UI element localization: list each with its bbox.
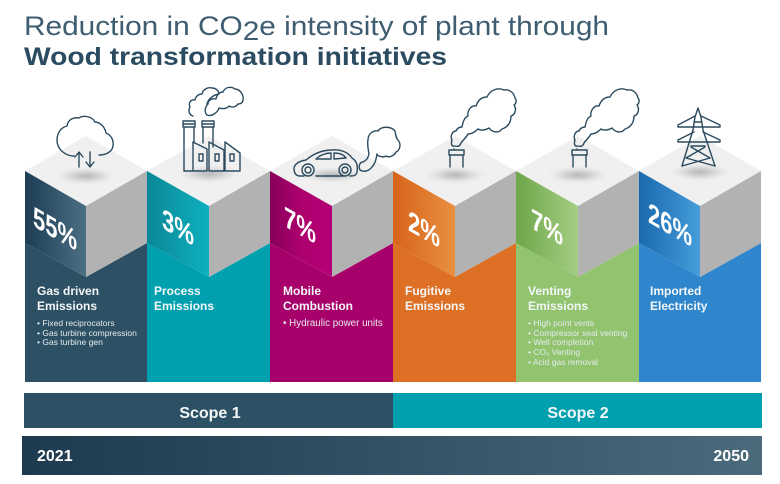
panel: venting emissions: • CO₂ Venting — [528, 347, 580, 357]
panel: gas driven emissions: Gas driven — [37, 284, 99, 298]
panel: gas driven emissions: • Gas turbine compression — [37, 328, 137, 338]
panel: gas driven emissions: 55% — [33, 200, 77, 258]
scope 2 bar: Scope 2 — [547, 405, 609, 422]
panel: gas driven emissions: • Gas turbine gen — [37, 337, 103, 347]
title — [24, 11, 609, 71]
scope 2 bar — [393, 393, 762, 428]
title: Reduction in CO — [24, 11, 222, 41]
title: Wood transformation initiatives — [24, 43, 447, 71]
panel: venting emissions: 7% — [531, 202, 563, 253]
panel: gas driven emissions: Emissions — [37, 299, 97, 313]
panel: venting emissions: Emissions — [528, 299, 588, 313]
panel: mobile combustion: 7% — [284, 200, 316, 251]
panel: gas driven emissions — [25, 136, 147, 382]
panel: venting emissions — [516, 136, 639, 382]
icon: cloud with arrows — [57, 116, 113, 167]
panel: gas driven emissions: • Fixed reciprocators — [37, 318, 115, 328]
panel: imported electricity: Imported — [650, 284, 701, 298]
icon: factory — [183, 87, 243, 171]
timeline bar: 2021 — [37, 448, 73, 465]
scope 1 bar: Scope 1 — [179, 405, 241, 422]
title: 2 — [243, 16, 259, 46]
scope 1 bar — [24, 393, 393, 428]
panel: imported electricity: Electricity — [650, 299, 708, 313]
panel: venting emissions: • Well completion — [528, 337, 593, 347]
panel: fugitive emissions: Fugitive — [405, 284, 451, 298]
icon: fugitive stack and smoke — [449, 89, 516, 167]
timeline bar: 2050 — [713, 448, 749, 465]
title: e intensity of plant through — [259, 11, 609, 41]
panel: venting emissions: • Compressor seal venting — [528, 328, 628, 338]
panel: imported electricity: 26% — [648, 196, 692, 254]
icon: venting stack and smoke — [572, 89, 639, 167]
panel: venting emissions: • Acid gas removal — [528, 357, 598, 367]
panel: process emissions: Process — [154, 284, 201, 298]
icon: power pylon — [678, 108, 720, 166]
panel: mobile combustion — [270, 136, 393, 382]
panel: fugitive emissions — [393, 136, 516, 382]
panel: fugitive emissions: Emissions — [405, 299, 465, 313]
panel: process emissions: Emissions — [154, 299, 214, 313]
panel: process emissions — [147, 136, 270, 382]
panel: venting emissions: Venting — [528, 284, 571, 298]
panel: venting emissions: • High point vents — [528, 318, 594, 328]
panel: imported electricity — [639, 136, 761, 382]
panel: mobile combustion: Mobile — [283, 284, 321, 298]
panel: fugitive emissions: 2% — [408, 204, 440, 255]
panel: process emissions: 3% — [162, 202, 194, 253]
panel: mobile combustion: • Hydraulic power units — [283, 318, 383, 329]
icon: car with exhaust — [294, 127, 400, 176]
timeline bar — [22, 436, 762, 475]
panel: mobile combustion: Combustion — [283, 299, 353, 313]
